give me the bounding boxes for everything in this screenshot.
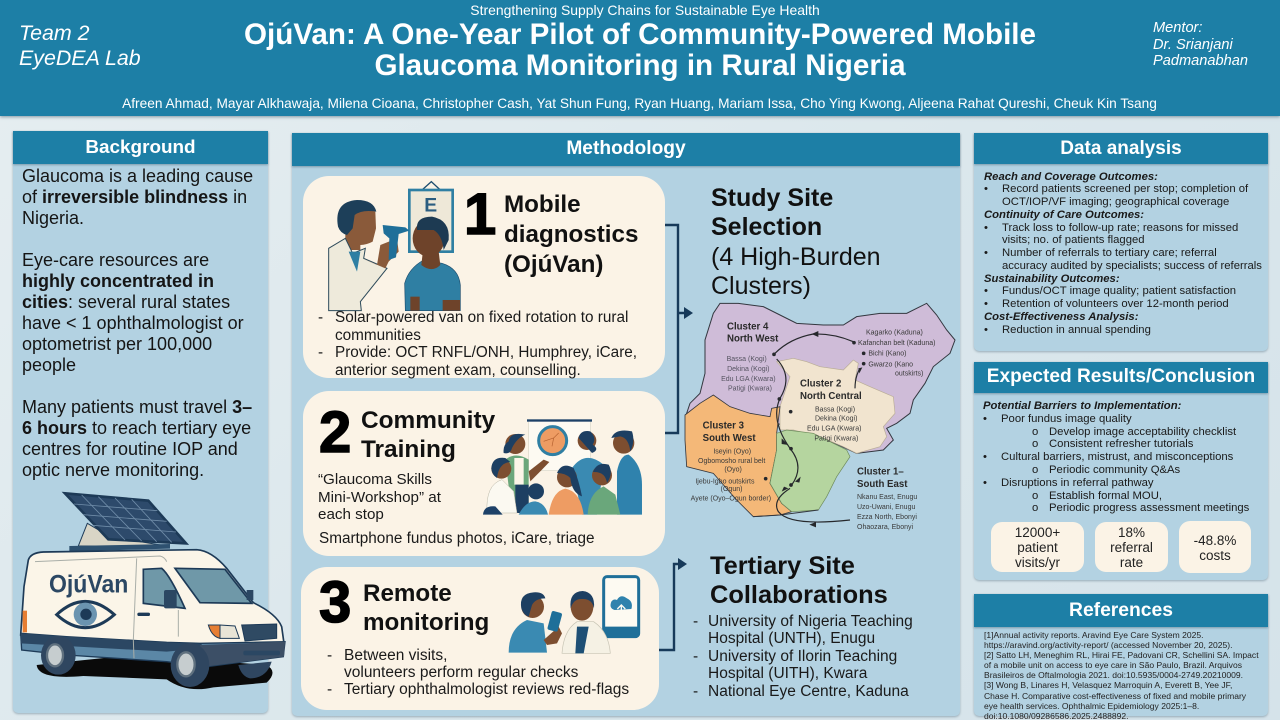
map: Nigeria study site clusters: Bassa (Kogi) [815,406,855,413]
list: tertiary hospitals: - [693,648,698,665]
heading: study site selection [711,184,881,300]
data analysis outcomes: Fundus/OCT image quality; patient satisfaction [1002,285,1236,297]
heading: study site selection: (4 High-Burden [711,242,881,270]
step 3 bullets: Tertiary ophthalmologist reviews red-flags [344,681,629,698]
stat: referral rate [1095,522,1168,572]
list: tertiary hospitals: University of Ilorin Teaching [708,648,897,665]
stat: referral rate: referral [1110,540,1153,555]
map: Nigeria study site clusters: Nkanu East, Enugu [857,494,917,501]
heading: expected results [974,362,1268,393]
background text: 6 hours to reach tertiary eye [22,418,251,438]
heading: methodology [292,133,960,166]
stat: patient visits: patient [1017,540,1058,555]
data analysis outcomes: • [984,298,988,310]
data analysis outcomes: Track loss to follow-up rate; reasons for missed [1002,222,1238,234]
stat: cost reduction: costs [1199,548,1231,562]
barriers to implementation: Consistent refresher tutorials [1049,438,1193,450]
map: Nigeria study site clusters: Ohaozara, Ebonyi [857,524,913,531]
data analysis outcomes: • [984,222,988,234]
data analysis outcomes: • [984,285,988,297]
list: tertiary hospitals [693,613,913,700]
step 1 heading: Mobile [504,191,581,218]
panel: background [13,131,268,713]
heading: background: Background [85,137,196,158]
reference list: https://aravind.org/activity-report/ (accessed November 20, 2025). [984,640,1232,650]
map: Nigeria study site clusters: North Central [800,391,862,402]
stat: cost reduction: -48.8% [1194,533,1236,548]
background text: of irreversible blindness in [22,187,247,207]
data analysis outcomes: Cost-Effectiveness Analysis: [984,311,1138,323]
step 1 heading [504,191,638,278]
data analysis outcomes: • [984,247,988,259]
heading: methodology: Methodology [566,138,686,159]
mentor [1153,20,1248,69]
barriers to implementation: Potential Barriers to Implementation: [983,400,1181,412]
step 2 heading [361,407,495,463]
panel: references [974,594,1268,716]
heading: tertiary site collaborations [710,552,888,609]
map: Nigeria study site clusters: Ijebu-Igbo outskirts [695,478,755,485]
barriers to implementation: o [1032,464,1038,476]
step 1 bullets: - [318,344,323,361]
mentor: Mentor: [1153,20,1202,36]
heading: data analysis: Data analysis [1060,138,1182,159]
reference list: eye health services. Ophthalmic Epidemiology 2025:1–8. [984,701,1199,711]
map: Nigeria study site clusters: outskirts) [895,371,923,378]
authors: Afreen Ahmad, Mayar Alkhawaja, Milena Cioana, Christopher Cash, Yat Shun Fung, Ryan Huang, Mariam Issa, Cho Ying Kwong, Aljeena Rahat Qureshi, Cheuk Kin Tsang [122,96,1157,111]
conference theme line: Strengthening Supply Chains for Sustainable Eye Health [470,2,820,18]
map: Nigeria study site clusters: Dekina (Kogi) [815,415,857,422]
map: Nigeria study site clusters: Uzo-Uwani, Enugu [857,504,915,511]
main title: Glaucoma Monitoring in Rural Nigeria [374,49,906,82]
card: step 1 mobile diagnostics [303,176,665,378]
icon: clinician examining patient's eye with eye chart: E [424,196,437,217]
map: Nigeria study site clusters: Cluster 4 [727,321,769,332]
training topics: Smartphone fundus photos, iCare, triage [319,530,595,547]
data analysis outcomes: OCT/IOP/VF imaging; geographical coverage [1002,196,1229,208]
barriers to implementation: Disruptions in referral pathway [1001,477,1154,489]
reference list: Chase H. Comparative cost-effectiveness of fixed and mobile primary [984,691,1246,701]
barriers to implementation: • [983,477,987,489]
stat: patient visits: 12000+ [1015,525,1060,540]
connector: step 3 to tertiary collaborations [659,558,687,652]
background text: highly concentrated in [22,271,214,291]
reference list: [2] Satto LH, Meneghim RL, Hirai FE, Padovani CR, Schellini SA. Impact [984,650,1259,660]
connector: steps 1 and 2 to study site selection [665,224,693,434]
icon: OjúVan solar-powered van: OjúVan [49,571,128,599]
barriers to implementation: o [1032,490,1038,502]
number 1: 1 [464,182,496,247]
heading: background [13,131,268,164]
stat: referral rate: 18% [1118,525,1145,540]
icon: community training group around fundus poster [483,419,642,515]
map: Nigeria study site clusters: South East [857,479,908,490]
background text: optometrist per 100,000 [22,334,212,354]
data analysis outcomes: • [984,324,988,336]
map: Nigeria study site clusters: South West [703,433,756,444]
background text: optic nerve monitoring. [22,460,204,480]
data analysis outcomes: Record patients screened per stop; completion of [1002,183,1248,195]
map: Nigeria study site clusters: Bassa (Kogi) [727,356,767,363]
icon: OjúVan solar-powered van [20,492,286,690]
map: Nigeria study site clusters: (Ogun) [721,486,742,493]
step 1 bullets: - [318,309,323,326]
step 3 bullets: Between visits, [344,647,447,664]
map: Nigeria study site clusters: Edu LGA (Kwara) [807,425,861,432]
barriers to implementation: Periodic progress assessment meetings [1049,502,1249,514]
step 1 bullets [318,309,637,378]
background text: cities: several rural states [22,292,230,312]
number 3: 3 [319,570,351,635]
map: Nigeria study site clusters: (Oyo) [724,466,742,473]
step 2 heading: Community [361,407,495,434]
background text: Nigeria. [22,208,84,228]
heading: references: References [1069,600,1173,621]
team name [19,21,141,70]
map: Nigeria study site clusters: Edu LGA (Kwara) [721,376,776,383]
step 3 heading: monitoring [363,609,489,636]
barriers to implementation: o [1032,438,1038,450]
card: step 3 remote monitoring [301,567,659,710]
step 1 bullets: Provide: OCT RNFL/ONH, Humphrey, iCare, [335,344,637,361]
data analysis outcomes: accuracy audited by specialists; success of referrals [1002,260,1262,272]
step 1 bullets: Solar-powered van on fixed rotation to rural [335,309,628,326]
map: Nigeria study site clusters: Iseyin (Oyo) [713,448,751,455]
heading: study site selection: Clusters) [711,272,811,300]
heading: study site selection: Study Site [711,184,833,212]
map: Nigeria study site clusters: Ogbomosho rural belt [698,458,765,465]
workshop description: each stop [318,506,384,523]
step 3 bullets: - [327,681,332,698]
map: Nigeria study site clusters: Kafanchan belt (Kaduna) [858,340,935,347]
background text: Many patients must travel 3– [22,397,252,417]
map: Nigeria study site clusters: Patigi (Kwara) [814,435,858,442]
map: Nigeria study site clusters: Cluster 3 [703,421,745,432]
panel: data analysis [974,133,1268,351]
data analysis outcomes: Continuity of Care Outcomes: [984,209,1144,221]
stat: patient visits: visits/yr [1015,555,1060,570]
step 2 heading: Training [361,436,456,463]
step 3 bullets [327,647,629,698]
data analysis outcomes: Sustainability Outcomes: [984,272,1120,284]
background text: people [22,355,76,375]
reference list [984,630,1259,720]
data analysis outcomes: • [984,183,988,195]
workshop description [318,471,441,523]
card: step 2 community training [303,391,665,556]
team name: Team 2 [19,21,90,45]
number 2: 2 [319,400,351,465]
stat: patient visits [991,522,1084,572]
step 1 heading: (OjúVan) [504,251,603,278]
map: Nigeria study site clusters: North West [727,333,779,344]
barriers to implementation: o [1032,502,1038,514]
step 1 heading: diagnostics [504,221,638,248]
panel: methodology [292,133,960,716]
map: Nigeria study site clusters [684,302,956,531]
stat: referral rate: rate [1120,555,1143,570]
heading: references [974,594,1268,627]
list: tertiary hospitals: Hospital (UNTH), Enugu [708,630,875,647]
map: Nigeria study site clusters: Dekina (Kogi) [727,366,770,373]
step 3 bullets: volunteers perform regular checks [344,664,578,681]
barriers to implementation: Establish formal MOU, [1049,490,1162,502]
main title [244,18,1036,82]
data analysis outcomes: Retention of volunteers over 12-month period [1002,298,1229,310]
data analysis outcomes: Reach and Coverage Outcomes: [984,170,1158,182]
heading: study site selection: Selection [711,213,822,241]
background text: Eye-care resources are [22,250,209,270]
barriers to implementation: • [983,413,987,425]
list: tertiary hospitals: University of Nigeria Teaching [708,613,913,630]
heading: data analysis [974,133,1268,164]
panel: expected results and conclusion [974,362,1268,580]
barriers to implementation: Cultural barriers, mistrust, and misconceptions [1001,451,1233,463]
background text: centres for routine IOP and [22,439,238,459]
step 1 bullets: anterior segment exam, counselling. [335,362,581,378]
step 3 bullets: - [327,647,332,664]
barriers to implementation: Develop image acceptability checklist [1049,426,1236,438]
header banner [0,0,1280,116]
mentor: Dr. Srianjani [1153,37,1233,53]
barriers to implementation: Periodic community Q&As [1049,464,1180,476]
heading: expected results: Expected Results/Conclusion [987,366,1255,387]
reference list: [1]Annual activity reports. Aravind Eye Care System 2025. [984,630,1203,640]
step 1 bullets: communities [335,326,421,344]
data analysis outcomes: Number of referrals to tertiary care; referral [1002,247,1217,259]
heading: tertiary site collaborations: Collaborations [710,581,888,609]
team name: EyeDEA Lab [19,46,141,70]
barriers to implementation: • [983,451,987,463]
reference list: [3] Wong B, Linares H, Velasquez Marroquin A, Everett B, Yee JF, [984,680,1232,690]
map: Nigeria study site clusters: Cluster 2 [800,379,841,390]
list: tertiary hospitals: National Eye Centre, Kaduna [708,683,909,700]
stat: cost reduction [1179,521,1251,573]
reference list: of a mobile unit on access to eye care in São Paulo, Brazil. Arquivos [984,660,1242,670]
map: Nigeria study site clusters: Ezza North, Ebonyi [857,514,917,521]
background text: have < 1 ophthalmologist or [22,313,244,333]
map: Nigeria study site clusters: Bichi (Kano) [868,351,906,358]
mentor: Padmanabhan [1153,53,1248,69]
map: Nigeria study site clusters: Cluster 1– [857,467,904,478]
workshop description: “Glaucoma Skills [318,471,432,488]
main title: OjúVan: A One-Year Pilot of Community-Powered Mobile [244,18,1036,51]
barriers to implementation: Poor fundus image quality [1001,413,1132,425]
map: Nigeria study site clusters: Gwarzo (Kano [868,361,913,368]
barriers to implementation [983,400,1249,514]
heading: tertiary site collaborations: Tertiary Site [710,552,855,580]
background text: Glaucoma is a leading cause [22,166,253,186]
data analysis outcomes [984,170,1262,336]
map: Nigeria study site clusters: Kagarko (Kaduna) [866,330,923,337]
icon: clinician examining patient's eye with eye chart [328,180,461,312]
step 3 heading [363,580,489,636]
data analysis outcomes: visits; no. of patients flagged [1002,234,1145,246]
list: tertiary hospitals: Hospital (UITH), Kwara [708,665,867,682]
reference list: Brasileiros de Oftalmologia 2021. doi:10.5935/0004-2749.20210009. [984,670,1243,680]
list: tertiary hospitals: - [693,683,698,700]
workshop description: Mini-Workshop” at [318,488,441,506]
background text [22,166,253,480]
data analysis outcomes: Reduction in annual spending [1002,324,1151,336]
step 3 heading: Remote [363,580,452,607]
map: Nigeria study site clusters: Ayete (Oyo–Ogun border) [691,496,771,503]
map: Nigeria study site clusters: Patigi (Kwara) [728,386,772,393]
list: tertiary hospitals: - [693,613,698,630]
barriers to implementation: o [1032,426,1038,438]
icon: volunteer, clinician and cloud upload phone [508,575,640,654]
